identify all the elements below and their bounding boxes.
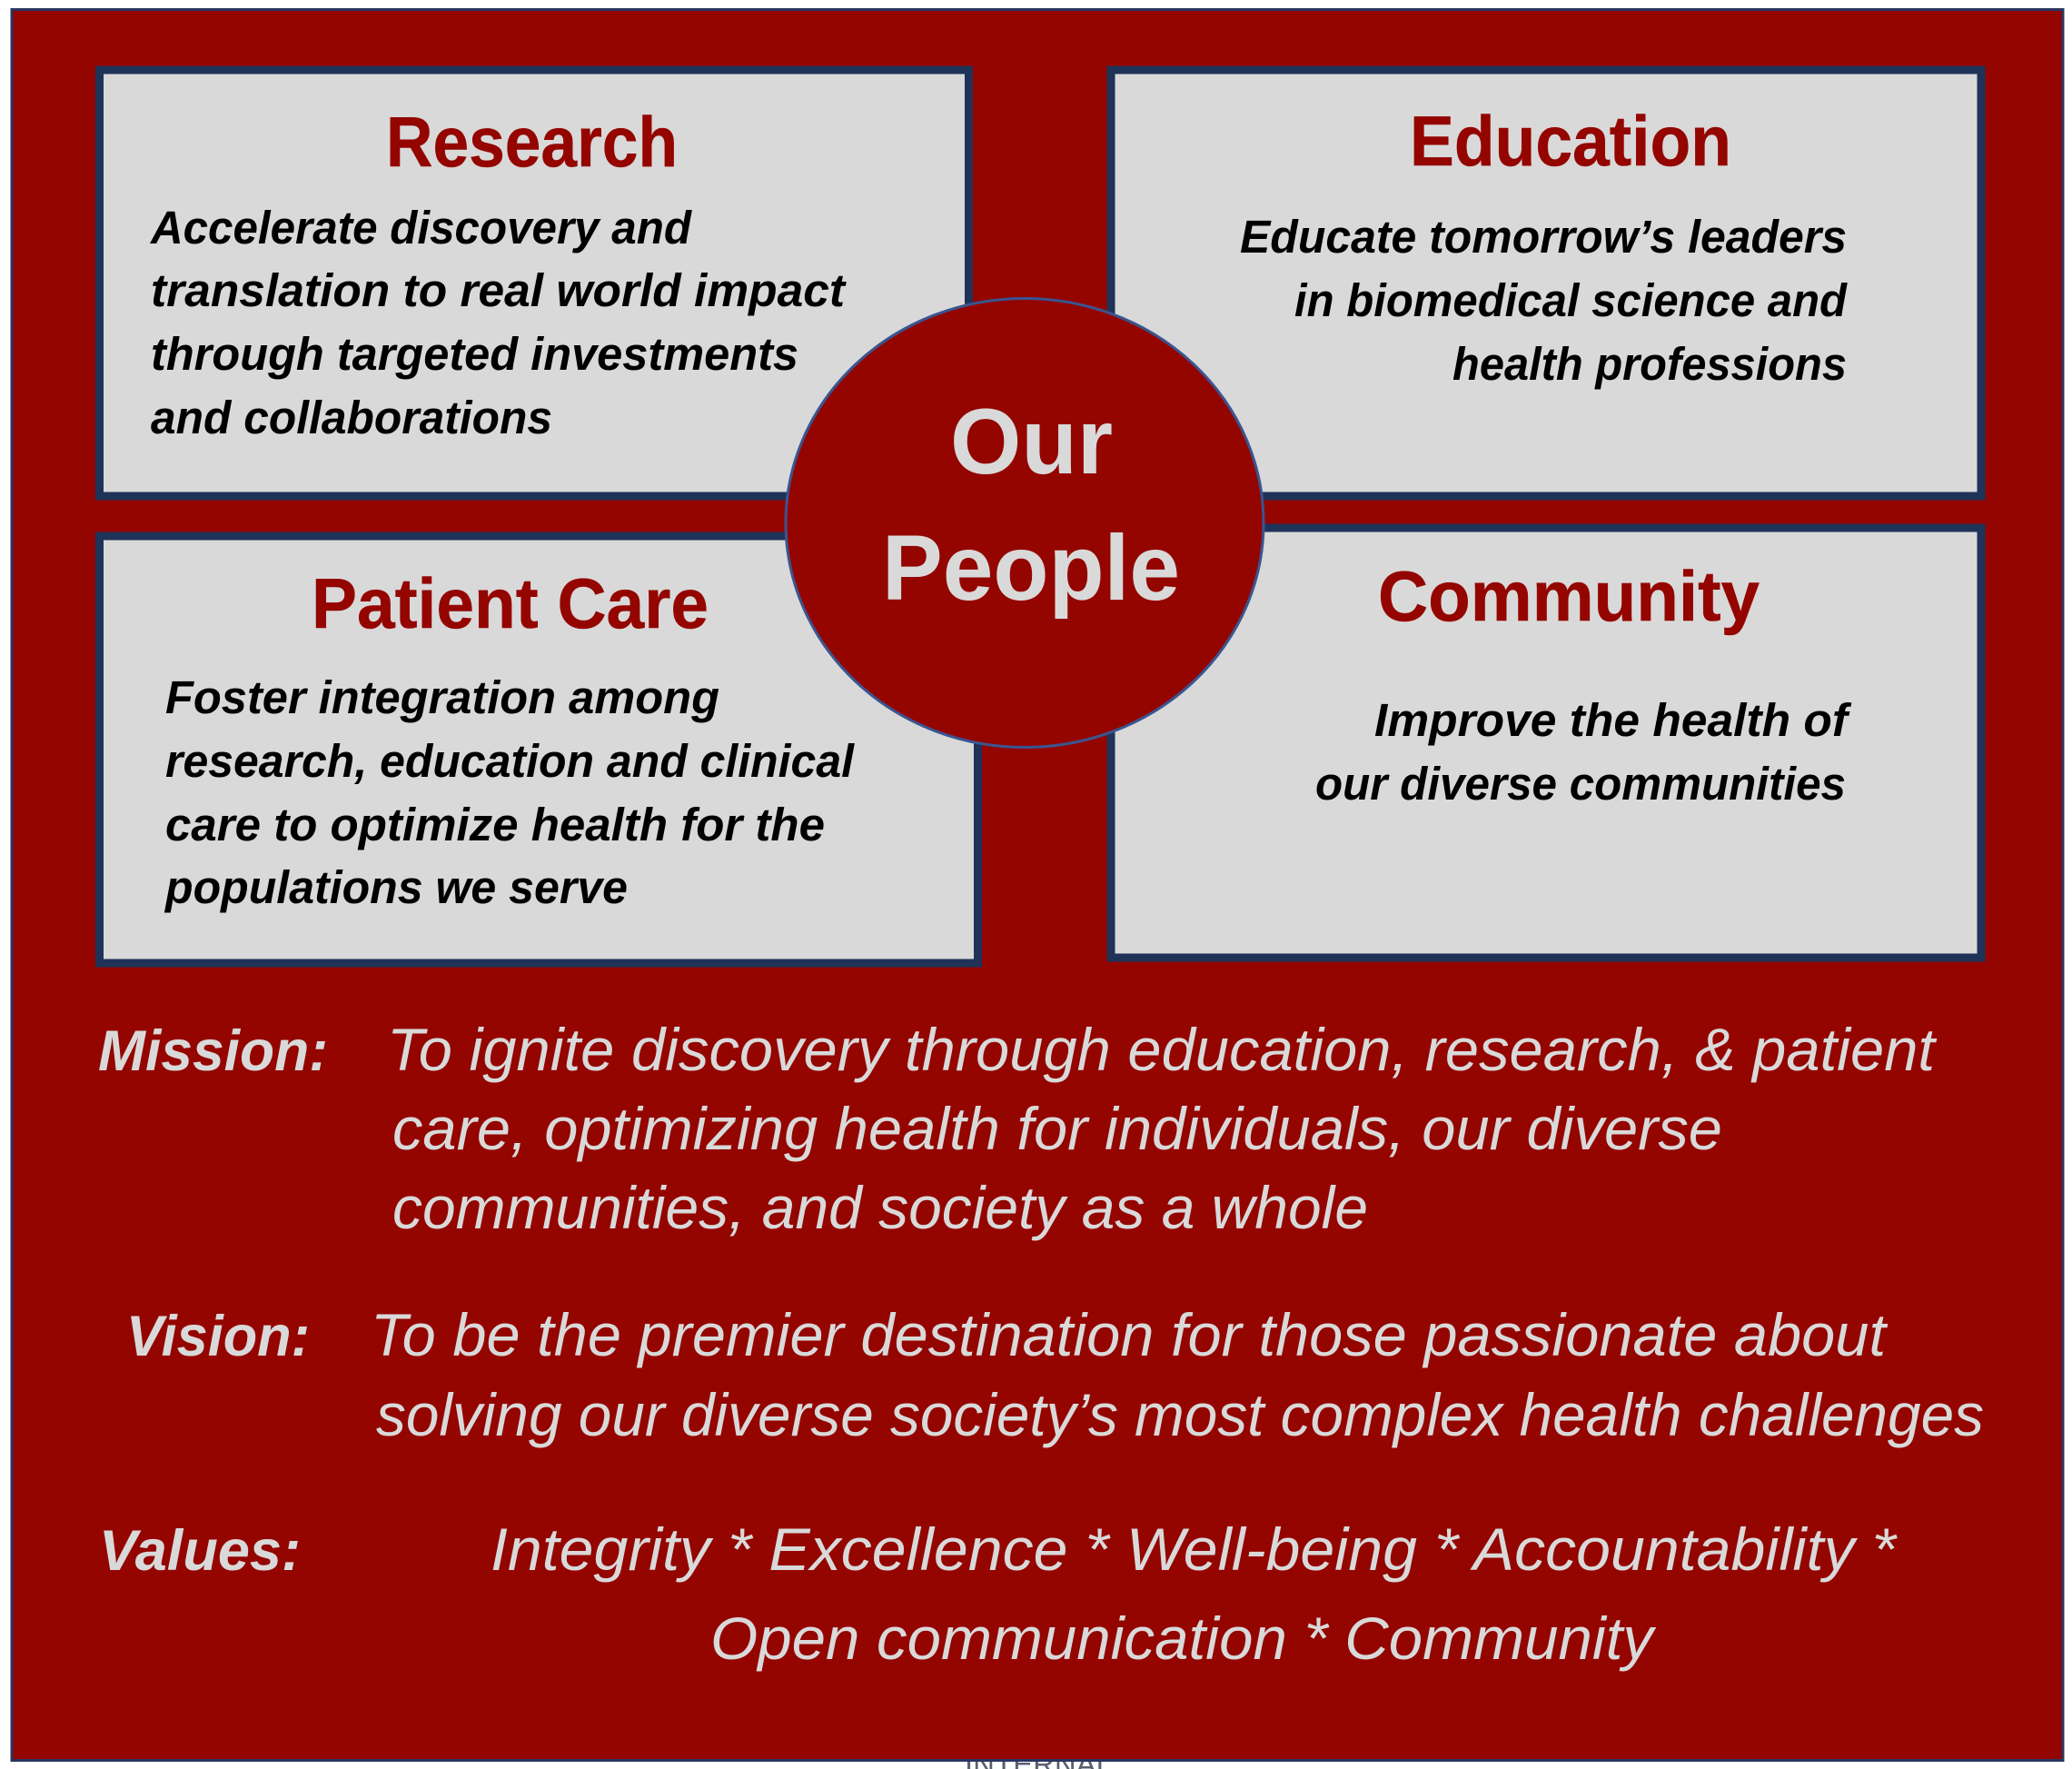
text: research description: through targeted investments: [151, 328, 798, 380]
text: community description: Improve the health of: [1374, 694, 1852, 746]
text: community description: our diverse communities: [1315, 758, 1846, 810]
center circle: our people: People: [882, 516, 1180, 620]
values statement: Open communication * Community: [710, 1605, 1657, 1672]
center circle: our people: [786, 298, 1264, 747]
text: research description: translation to real world impact: [151, 264, 847, 316]
text: education description: [1240, 211, 1849, 390]
panel: community: [1111, 528, 1981, 958]
panel: patient care: [100, 536, 977, 963]
text: patient care description: care to optimize health for the: [165, 799, 825, 850]
text: education description: Educate tomorrow’s leaders: [1240, 211, 1847, 263]
values statement: Values:: [99, 1519, 301, 1583]
mission statement: communities, and society as a whole: [392, 1174, 1368, 1241]
heading: community: Community: [1378, 556, 1760, 636]
heading: education: Education: [1410, 101, 1731, 181]
mission statement: care, optimizing health for individuals, our diverse: [392, 1095, 1722, 1162]
vision statement: Vision:: [126, 1305, 310, 1368]
text: community description: [1315, 694, 1852, 810]
panel: research: [100, 70, 968, 496]
text: research description: [149, 202, 847, 443]
values statement: [99, 1516, 1898, 1672]
text: patient care description: populations we serve: [164, 861, 628, 913]
mission statement: To ignite discovery through education, research, & patient: [387, 1016, 1938, 1083]
text: research description: Accelerate discovery and: [149, 202, 693, 253]
center circle: our people: Our: [950, 390, 1113, 493]
text: education description: in biomedical science and: [1294, 274, 1849, 326]
text: patient care description: [164, 671, 856, 913]
mission statement: Mission:: [98, 1019, 328, 1083]
text: research description: and collaborations: [151, 392, 552, 443]
text: education description: health professions: [1452, 338, 1847, 390]
mission statement: [98, 1016, 1938, 1241]
text: patient care description: research, education and clinical: [165, 735, 856, 787]
values statement: Integrity * Excellence * Well-being * Accountability *: [491, 1516, 1898, 1583]
vision statement: solving our diverse society’s most complex health challenges: [376, 1381, 1984, 1448]
vision statement: [126, 1301, 1984, 1448]
heading: patient care: Patient Care: [312, 563, 709, 643]
text: patient care description: Foster integration among: [165, 671, 719, 723]
vision statement: To be the premier destination for those passionate about: [371, 1301, 1889, 1368]
panel: education: [1111, 70, 1981, 496]
heading: research: Research: [386, 102, 678, 182]
